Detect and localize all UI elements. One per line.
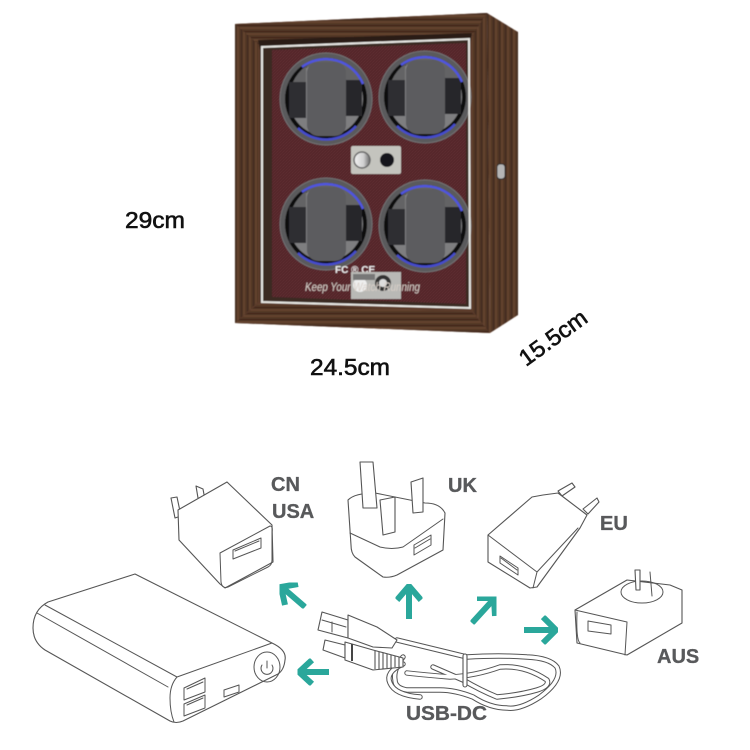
arrow to UK plug bbox=[397, 586, 421, 619]
AUS plug bbox=[575, 570, 682, 655]
cable band bbox=[463, 654, 467, 687]
DC connector bbox=[323, 640, 345, 658]
sticker bbox=[351, 272, 401, 299]
dimension: height: 29cm bbox=[125, 207, 185, 233]
box side panel bbox=[487, 13, 518, 333]
power bank bbox=[33, 574, 285, 722]
dimension: width: 24.5cm bbox=[310, 354, 390, 380]
EU plug bbox=[488, 483, 599, 588]
label CN USA bbox=[271, 474, 314, 523]
dimension: depth: 15.5cm bbox=[514, 304, 592, 371]
arrow to power bank bbox=[299, 660, 329, 684]
arrow to EU plug bbox=[472, 598, 495, 623]
arrow to USA plug bbox=[281, 584, 305, 607]
arrow to AUS plug bbox=[524, 617, 556, 643]
glass frame bbox=[260, 38, 471, 309]
UK plug bbox=[348, 462, 445, 577]
maroon backing bbox=[272, 43, 466, 304]
box front frame bbox=[235, 13, 490, 333]
control panel bbox=[351, 146, 401, 174]
USA plug bbox=[171, 482, 273, 588]
power button bbox=[254, 652, 280, 682]
label USB-DC: USB-DC bbox=[406, 703, 487, 725]
USB-DC cable bbox=[318, 612, 558, 708]
certification marks: FC ® CE bbox=[335, 265, 375, 276]
accessories line art bbox=[33, 462, 682, 722]
label UK: UK bbox=[448, 475, 477, 497]
label AUS: AUS bbox=[657, 646, 699, 668]
winder bottom left bbox=[280, 178, 372, 270]
watch winder box bbox=[235, 13, 518, 333]
winder top right bbox=[379, 51, 471, 143]
USB ports bbox=[184, 678, 205, 716]
winder top left bbox=[280, 53, 372, 145]
label EU: EU bbox=[600, 513, 628, 535]
label CN USA: USA bbox=[272, 501, 314, 523]
lock on the side bbox=[497, 164, 505, 179]
inner shadow of frame bbox=[258, 33, 472, 50]
glass white edge bbox=[262, 39, 470, 308]
USB connector bbox=[318, 612, 348, 638]
winder bottom right bbox=[379, 180, 471, 272]
label CN USA: CN bbox=[271, 474, 300, 496]
slogan: Keep Your Watch Running bbox=[305, 280, 420, 294]
